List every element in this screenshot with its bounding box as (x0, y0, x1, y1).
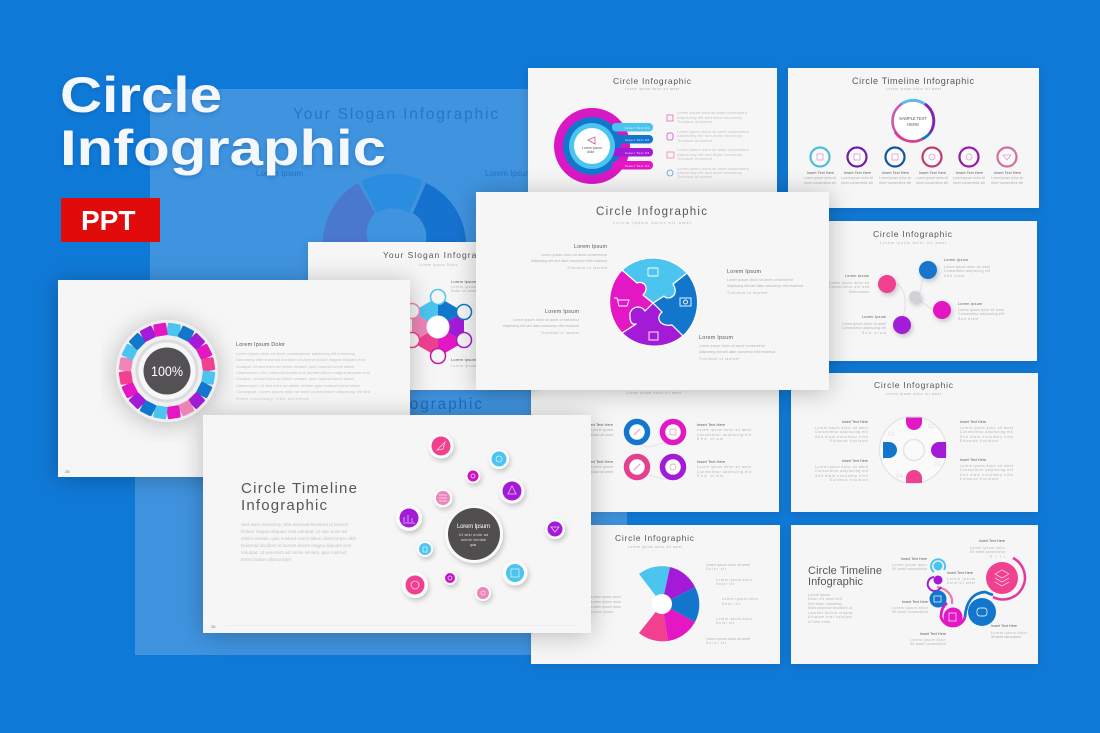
panel: circle timeline slide (788, 68, 1039, 208)
left paragraph: Lorem ipsum (808, 593, 830, 597)
central ring: SAMPLE TEXT (899, 116, 927, 121)
puzzle labels (503, 244, 803, 361)
central circle: quis (470, 543, 477, 547)
wheel labels: Euismod tincidunt (960, 477, 998, 481)
node labels: Lorem ipsum dolor sit amet (958, 308, 1004, 312)
satellite circles (396, 434, 565, 601)
winding labels: Lorem ipsum dolor (910, 638, 947, 642)
pie labels: Dolor sit (722, 602, 740, 606)
wheel labels: Consectetur adipiscing elit (960, 430, 1013, 434)
main title (60, 67, 386, 176)
wheel labels: Sed diam nonummy nibh (815, 435, 868, 439)
item captions: Lorem ipsum dolor sit (804, 176, 836, 180)
ghost slide: upper translucent panel (150, 89, 540, 415)
item captions: Amet consectetur elit (916, 181, 948, 185)
list icons and text (667, 110, 750, 179)
body text (236, 342, 371, 401)
item captions: Insert Text Here (919, 171, 946, 175)
node labels: Lorem ipsum dolor sit amet (842, 322, 886, 326)
pie chart (639, 566, 699, 641)
item captions: Amet consectetur elit (841, 181, 873, 185)
wheel: 03 (934, 462, 941, 468)
node labels: Consectetur adipiscing elit (944, 269, 990, 273)
list icons and text: Tincidunt ut laoreet (677, 156, 713, 161)
winding labels: Elit (990, 555, 1005, 559)
ring labels: Lorem ipsum dolor sit amet (697, 428, 751, 432)
item captions: Amet consectetur elit (804, 181, 836, 185)
puzzle labels: Lorem Ipsum (699, 335, 734, 341)
winding labels: Dolor sit amet (947, 581, 975, 585)
paragraph: Volutpat. Ut wisi enim ad minim veniam, quis nostrud (241, 550, 346, 555)
winding labels: Sit amet consectetur (991, 635, 1022, 639)
central ring (892, 100, 934, 142)
central circle (445, 505, 503, 563)
paragraph: Sed diam nonummy nibh euismod tincidunt ut laoreet (241, 522, 349, 527)
pie labels: Lorem ipsum (591, 610, 613, 614)
list icons and text: Tincidunt ut laoreet (677, 138, 713, 143)
left paragraph: Sed diam nonummy (808, 602, 842, 606)
ring labels: Consectetur adipiscing elit (697, 470, 751, 474)
wheel labels: Euismod tincidunt (830, 439, 868, 443)
winding labels (892, 539, 1028, 646)
concentric circles (554, 108, 653, 184)
left paragraph: Dolor sit amet elit (808, 597, 842, 601)
node labels: Sed diam (958, 317, 978, 321)
pie labels: Dolor sit (706, 641, 726, 645)
winding labels: Lorem ipsum dolor (892, 563, 928, 567)
winding circles (928, 558, 1025, 626)
item captions: Insert Text Here (844, 171, 871, 175)
nodes (878, 261, 951, 334)
wheel labels: Sed diam nonummy nibh (960, 473, 1013, 477)
pie labels (591, 563, 759, 645)
item captions: Lorem ipsum dolor sit (879, 176, 911, 180)
segmented ring: 100% (151, 364, 183, 379)
ghost slide: upper translucent panel: Your Slogan Infographic (293, 106, 498, 123)
winding labels: Lorem ipsum dolor (970, 546, 1006, 550)
ring labels: Sed diam (697, 437, 723, 441)
panel: slogan slide: Dolor sit amet (451, 289, 476, 293)
item captions: Insert Text Here (994, 171, 1021, 175)
winding labels: Sit amet consectetur (970, 550, 1006, 554)
pie labels: Lorem ipsum dolor (591, 595, 622, 599)
panel: four node branch slide: Circle Infographic (873, 229, 953, 239)
ghost slide: upper translucent panel: Lorem Ipsum (256, 169, 303, 178)
central circle: Ut wisi enim ad (459, 533, 488, 537)
winding labels: Sit amet consectetur (910, 642, 947, 646)
list icons and text: Adipiscing elit sed diam nonummy (677, 115, 742, 120)
puzzle circle (610, 258, 698, 346)
winding labels: Insert Text Here (901, 557, 927, 561)
winding labels: Sit amet consectetur (892, 610, 929, 614)
paragraph (241, 522, 356, 562)
list icons and text: Lorem ipsum dolor sit amet consectetur (677, 129, 750, 134)
wheel labels: Insert Text Here (960, 420, 986, 424)
list icons and text: Lorem ipsum dolor sit amet consectetur (677, 110, 748, 115)
puzzle labels: Adipiscing elit sed diam nonummy nibh euismod (531, 259, 607, 263)
winding labels: Insert Text Here (902, 600, 928, 604)
item captions: Lorem ipsum dolor sit (841, 176, 873, 180)
ghost slide: upper translucent panel: Lorem Ipsum (485, 169, 532, 178)
body text: Nonummy nibh euismod tincidunt ut laoreet dolore magna aliquam erat (236, 357, 366, 362)
pie labels: Lorem ipsum dolor (722, 597, 759, 601)
paragraph: Dolore magna aliquam erat volutpat. Ut wisi enim ad (241, 529, 347, 534)
node labels: Diam nonum (849, 290, 869, 294)
ring labels: Insert Text Here (697, 460, 725, 464)
pie labels: Lorem ipsum dolor (716, 617, 753, 621)
item captions: Amet consectetur elit (953, 181, 985, 185)
puzzle labels: Lorem Ipsum (574, 244, 608, 250)
node labels: Consectetur elit sed (829, 285, 869, 289)
left paragraph: Laoreet dolore magna (808, 611, 852, 615)
panel: pie slide (531, 525, 780, 664)
item captions: Amet consectetur elit (991, 181, 1023, 185)
central circle: minim veniam (461, 538, 486, 542)
pie labels: Lorem ipsum dolor (591, 605, 622, 609)
ring labels: Lorem ipsum (591, 428, 613, 432)
wheel labels: Lorem ipsum dolor sit amet (960, 464, 1013, 468)
list icons and text: Tincidunt ut laoreet (677, 174, 713, 179)
list icons and text: Lorem ipsum dolor sit amet consectetur (677, 147, 750, 152)
winding labels: Lorem ipsum dolor (892, 606, 929, 610)
panel: four rings slide: Lorem ipsum dolor sit amet (626, 391, 681, 395)
pie labels: Dolor sit (716, 621, 734, 625)
pie labels: Dolor sit (716, 582, 734, 586)
puzzle labels: Tincidunt ut laoreet (541, 331, 579, 335)
list icons and text: Adipiscing elit sed diam nonummy (677, 170, 742, 175)
panel: four node branch slide: Lorem ipsum dolor sit amet (880, 241, 946, 245)
central circle: Lorem Ipsum (457, 524, 490, 530)
node labels: Sed diam (944, 274, 964, 278)
PPT badge: PPT (81, 205, 135, 236)
wheel labels: Insert Text Here (842, 420, 868, 424)
heading: Circle Timeline (241, 480, 357, 497)
winding labels: Lorem ipsum (947, 577, 975, 581)
list icons and text: Lorem ipsum dolor sit amet consectetur (677, 166, 750, 171)
panel: 100 percent slide (58, 280, 410, 477)
panel: pie slide: Lorem ipsum dolor sit amet (628, 545, 682, 549)
node labels: Consectetur adipiscing elit (958, 312, 1004, 316)
ring labels: Insert Text Here (585, 460, 613, 464)
node labels: Lorem ipsum dolor sit (829, 281, 869, 285)
panel: four rings slide (531, 372, 779, 512)
item captions: Insert Text Here (882, 171, 909, 175)
puzzle labels: Tincidunt ut laoreet (567, 266, 607, 270)
winding labels: Insert Text Here (920, 632, 946, 636)
wheel (880, 416, 946, 484)
pie labels: Dolor sit (706, 567, 726, 571)
pie labels: Lorem ipsum dolor sit amet (706, 563, 750, 567)
wheel labels: Sed diam nonummy nibh (815, 474, 868, 478)
PPT badge (61, 198, 160, 242)
wheel labels: Lorem ipsum dolor sit amet (815, 465, 868, 469)
node labels (829, 258, 1004, 335)
panel: four node branch slide (790, 221, 1037, 361)
ring labels: Insert Text Here (697, 423, 725, 427)
main title: Infographic (60, 120, 386, 176)
puzzle labels: Lorem ipsum dolor sit amet consectetur (699, 344, 766, 348)
wheel labels: Sed diam nonummy nibh (960, 435, 1013, 439)
item captions: Lorem ipsum dolor sit (991, 176, 1023, 180)
node labels: Lorem Ipsum (944, 258, 968, 262)
puzzle labels: Adipiscing elit sed diam nonummy nibh euismod (699, 350, 775, 354)
panel: slogan slide: Your Slogan Infographic (383, 250, 497, 260)
concentric circles: Insert Text 01 (625, 126, 649, 130)
puzzle labels: Tincidunt ut laoreet (727, 291, 767, 295)
puzzle labels: Lorem ipsum dolor sit amet consectetur (513, 318, 580, 322)
central ring: HERE (907, 122, 919, 127)
puzzle labels: Adipiscing elit sed diam nonummy nibh euismod (503, 324, 579, 328)
ring labels (585, 423, 751, 478)
node labels: Lorem ipsum dolor sit amet (944, 265, 990, 269)
left paragraph: Ut wisi enim (808, 620, 830, 624)
ghost slide: lower translucent panel (135, 396, 627, 655)
item rings (810, 148, 1016, 166)
left paragraph (808, 593, 852, 624)
panel: puzzle slide: Circle Infographic (596, 206, 707, 218)
puzzle labels: Lorem Ipsum (727, 269, 762, 275)
pie labels: Lorem ipsum dolor (716, 578, 753, 582)
body text: Lorem ipsum dolor sit amet, consectetuer adipiscing elit nonummy (236, 351, 355, 356)
paragraph: Euismod tincidunt ut laoreet dolore magna aliquam erat (241, 543, 352, 548)
item captions: Insert Text Here (807, 171, 834, 175)
concentric circles: Insert Text 03 (625, 151, 649, 155)
puzzle icons (614, 268, 691, 340)
panel: wheel slide: Lorem ipsum dolor sit amet (886, 392, 941, 396)
heading: Infographic (241, 497, 328, 514)
wheel labels: Consectetur adipiscing elit (960, 468, 1013, 472)
wheel: 04 (896, 474, 903, 480)
left paragraph: Aliquam erat volutpat (808, 615, 852, 619)
body text: Lorem Ipsum Dolor (236, 342, 285, 348)
panel: wheel slide: Circle Infographic (874, 380, 954, 390)
panel: slogan slide: Lorem ipsum (451, 285, 476, 289)
node labels: Lorem Ipsum (845, 274, 869, 278)
page number and rule: 26 (211, 624, 216, 629)
puzzle labels: Tincidunt ut laoreet (699, 357, 739, 361)
wheel labels: Consectetur adipiscing elit (815, 469, 868, 473)
wheel labels: Insert Text Here (842, 459, 868, 463)
panel: slogan slide: Lorem Ipsum (451, 357, 477, 362)
ring labels: Dolor sit amet (591, 470, 613, 474)
node labels: Consectetur adipiscing elit (842, 326, 886, 330)
wheel labels: Euismod tincidunt (830, 478, 868, 482)
item captions (804, 171, 1023, 185)
wheel labels (815, 420, 1013, 482)
panel: winding timeline slide: Infographic (808, 576, 864, 588)
panel: slogan slide: Lorem Ipsum (451, 279, 477, 284)
node labels: Lorem Ipsum (862, 315, 886, 319)
list icons and text: Adipiscing elit sed diam nonummy (677, 152, 742, 157)
ring labels: Consectetur adipiscing elit (697, 433, 751, 437)
winding labels: Insert Text Here (979, 539, 1005, 543)
panel: pie slide: Circle Infographic (615, 533, 695, 543)
body text: Diam nonummy nibh euismod (236, 396, 308, 401)
panel: concentric circle slide (528, 68, 777, 203)
puzzle labels: Lorem ipsum dolor sit amet consectetur (541, 253, 608, 257)
panel: circle timeline large slide (203, 415, 591, 633)
panel: winding timeline slide (791, 525, 1038, 664)
puzzle labels: Adipiscing elit sed diam nonummy nibh euismod (727, 284, 803, 288)
paragraph: Minim veniam, quis nostrud exerci tation ullamcorper nibh (241, 536, 356, 541)
node labels: Sed diam (862, 331, 886, 335)
wheel labels: Lorem ipsum dolor sit amet (815, 426, 868, 430)
ring labels: Lorem ipsum dolor sit amet (697, 465, 751, 469)
panel: slogan slide: Lorem ipsum (451, 364, 476, 368)
wheel labels: Consectetur adipiscing elit (815, 430, 868, 434)
wheel: 02 (928, 424, 935, 430)
main title: Circle (60, 67, 222, 123)
panel: wheel slide (791, 373, 1038, 512)
concentric circles: Insert Text 02 (625, 138, 649, 142)
panel: concentric circle slide: Circle Infographic (613, 76, 692, 86)
puzzle labels: Lorem ipsum dolor sit amet consectetur (727, 278, 794, 282)
ghost slide: lower translucent panel: Your Slogan Infographic (277, 396, 482, 413)
panel: slogan slide: Lorem Ipsum Dolor (419, 263, 458, 267)
concentric circles: Lorem Ipsum (582, 146, 602, 150)
rings (626, 422, 684, 479)
item captions: Lorem ipsum dolor sit (916, 176, 948, 180)
pie labels: Lorem ipsum dolor sit amet (706, 637, 750, 641)
heading (241, 480, 357, 514)
winding labels: Insert Text Here (947, 571, 973, 575)
wheel labels: Lorem ipsum dolor sit amet (960, 426, 1013, 430)
winding labels: Insert Text Here (991, 624, 1017, 628)
six point flower (404, 290, 472, 364)
wheel labels: Insert Text Here (960, 458, 986, 462)
body text: Consequat. Lorem ipsum dolor sit amet consectetuer adipiscing elit sed (236, 389, 370, 394)
list icons and text: Tincidunt ut laoreet (677, 119, 713, 124)
body text: Volutpat. Ut wisi enim ad minim veniam, quis nostrud exerci tation (236, 364, 354, 369)
panel: puzzle slide: Lorem ipsum dolor sit amet (613, 221, 692, 225)
left paragraph: Nibh euismod tincidunt ut (808, 606, 852, 610)
panel: circle timeline slide: Lorem ipsum dolor sit amet (886, 87, 941, 91)
panel: winding timeline slide: Circle Timeline (808, 565, 882, 577)
connector curves (897, 276, 936, 318)
item captions: Insert Text Here (956, 171, 983, 175)
panel: concentric circle slide: Lorem ipsum dolor sit amet (625, 87, 679, 91)
body text: Ullamcorper nibh euismod tincidunt ut laoreet dolore magna aliquam erat (236, 370, 371, 375)
ring labels: Insert Text Here (585, 423, 613, 427)
list icons and text: Adipiscing elit sed diam nonummy (677, 133, 742, 138)
ring labels: Lorem ipsum (591, 465, 613, 469)
panel: slogan slide (308, 242, 538, 390)
winding labels: Lorem ipsum dolor (991, 631, 1028, 635)
wheel labels: Euismod tincidunt (960, 439, 998, 443)
body text: Ullamcorper. Ut wisi enim ad minim veniam quis nostrud exerci tation (236, 383, 360, 388)
winding labels: Sit amet consectetur (892, 567, 928, 571)
panel: circle timeline slide: Circle Timeline Infographic (852, 76, 974, 86)
node labels: Lorem Ipsum (958, 302, 982, 306)
ring labels: Sed diam (697, 474, 723, 478)
wheel: 01 (888, 432, 895, 438)
paragraph: Exerci tation ullamcorper (241, 557, 292, 562)
item captions: Amet consectetur elit (879, 181, 911, 185)
ring labels: Dolor sit amet (591, 433, 613, 437)
item captions: Lorem ipsum dolor sit (953, 176, 985, 180)
concentric circles: Insert Text 04 (625, 164, 649, 168)
concentric circles: dolor (587, 150, 595, 154)
pie labels: Lorem ipsum dolor (591, 600, 622, 604)
segmented ring (116, 320, 218, 422)
page number: 28 (65, 469, 70, 474)
body text: Volutpat. Ut wisi enim ad minim veniam, quis nostrud exerci tation (236, 376, 354, 381)
puzzle labels: Lorem Ipsum (545, 309, 580, 315)
panel: puzzle slide (476, 192, 829, 390)
